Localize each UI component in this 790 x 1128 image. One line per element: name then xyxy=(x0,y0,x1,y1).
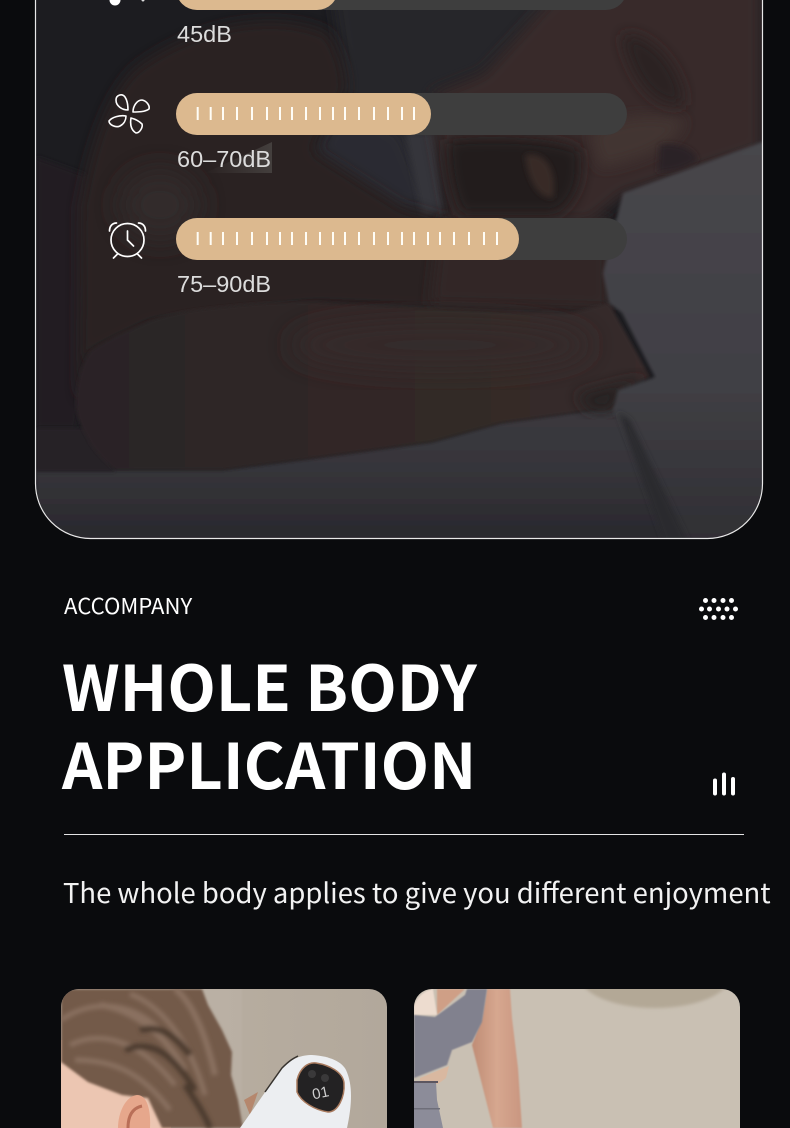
skin above top xyxy=(437,989,465,1015)
face xyxy=(433,0,762,222)
shirt xyxy=(338,10,534,93)
leggings xyxy=(414,1081,443,1128)
heading: whole body application: WHOLE BODY xyxy=(62,639,477,730)
bed sheet xyxy=(36,410,662,538)
subtitle: The whole body applies to give you different enjoyment xyxy=(63,871,771,911)
panel outline xyxy=(35,0,763,538)
massager device xyxy=(240,1055,351,1128)
midriff xyxy=(420,1066,449,1084)
icon: equalizer bars xyxy=(713,772,735,796)
bar: 45dB whisper: 45dB xyxy=(177,21,232,47)
massager device: 01 xyxy=(311,1083,331,1103)
pillow xyxy=(603,142,770,540)
bar: 60-70dB fan: 60–70dB xyxy=(177,146,271,172)
bar: 75-90dB alarm clock: 75–90dB xyxy=(177,271,271,297)
photo card: arm and waist xyxy=(414,989,740,1128)
icon: fan xyxy=(109,95,149,133)
heading: whole body application xyxy=(62,639,478,808)
icon: dot grid xyxy=(699,598,738,620)
arm xyxy=(472,989,522,1128)
photo: sleeping man xyxy=(36,0,770,545)
bar: 60-70dB fan xyxy=(176,93,627,173)
ear xyxy=(118,1095,150,1128)
back and upper arm xyxy=(80,22,436,363)
skin xyxy=(61,1040,171,1128)
icon: alarm clock xyxy=(110,223,146,258)
bar: 45dB whisper xyxy=(110,0,627,47)
heading: whole body application: APPLICATION xyxy=(62,717,476,808)
hair xyxy=(61,989,243,1128)
forearm xyxy=(76,302,650,470)
grey sports top xyxy=(414,989,487,1078)
divider xyxy=(64,834,744,835)
bar: 75-90dB alarm clock xyxy=(176,218,627,297)
photo card: neck massage xyxy=(61,989,387,1128)
panel: sleeping man noise levels xyxy=(34,0,764,540)
eyebrow: accompany: ACCOMPANY xyxy=(64,589,192,621)
